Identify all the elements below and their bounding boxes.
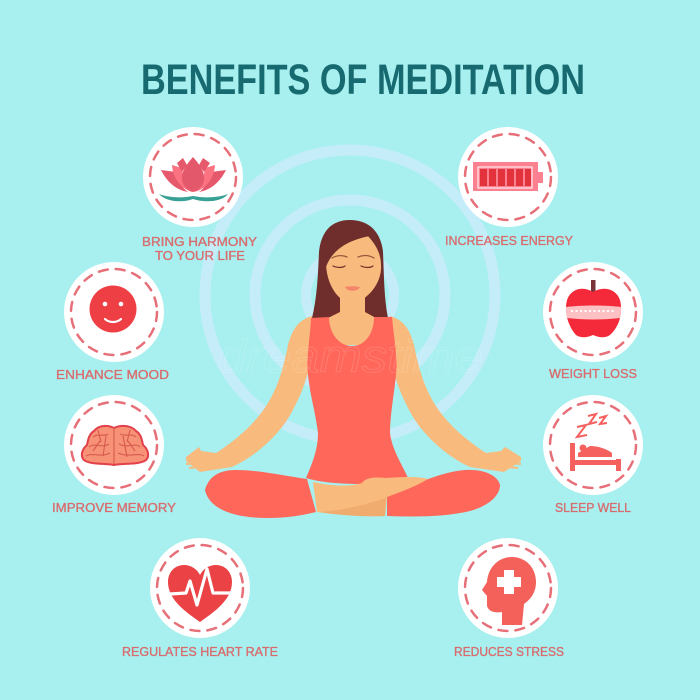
icon: brain <box>82 426 148 465</box>
meditating woman <box>186 220 521 518</box>
label: ENHANCE MOOD <box>56 367 169 382</box>
icon: apple with tape <box>566 280 621 337</box>
benefit: sleep well <box>543 395 643 515</box>
icon: bed and zzz <box>570 414 621 471</box>
label: IMPROVE MEMORY <box>52 500 176 515</box>
icon: heart with pulse <box>168 565 232 622</box>
hair fringe <box>320 222 370 267</box>
label: SLEEP WELL <box>555 500 631 515</box>
label line 2: TO YOUR LIFE <box>155 248 245 263</box>
benefit: regulates heart rate <box>122 538 278 659</box>
concentric rings <box>205 150 495 440</box>
label: WEIGHT LOSS <box>549 366 637 381</box>
arms <box>186 316 521 472</box>
legs <box>205 470 500 518</box>
label: REDUCES STRESS <box>454 644 564 659</box>
eyes and brows <box>332 256 374 268</box>
icon: smiley <box>90 286 136 332</box>
icon: head with cross <box>482 557 536 625</box>
benefit: reduces stress <box>454 538 564 659</box>
benefit: increases energy <box>445 127 573 248</box>
label: BRING HARMONY <box>142 234 257 249</box>
title: BENEFITS OF MEDITATION <box>141 57 585 104</box>
watermark: dreamstime <box>218 330 483 382</box>
hand fingers <box>186 463 521 468</box>
label: INCREASES ENERGY <box>445 233 573 248</box>
dress <box>306 317 408 484</box>
crossed feet <box>313 477 428 516</box>
neck and chest <box>328 290 376 345</box>
hair <box>312 220 388 318</box>
benefit: bring harmony <box>142 127 257 263</box>
benefit: weight loss <box>543 262 643 381</box>
mouth <box>345 286 360 291</box>
label: REGULATES HEART RATE <box>122 644 278 659</box>
face <box>326 234 381 304</box>
benefit: enhance mood <box>56 262 169 382</box>
icon: lotus <box>159 157 228 201</box>
benefit: improve memory <box>52 395 176 515</box>
icon: battery <box>473 162 543 191</box>
